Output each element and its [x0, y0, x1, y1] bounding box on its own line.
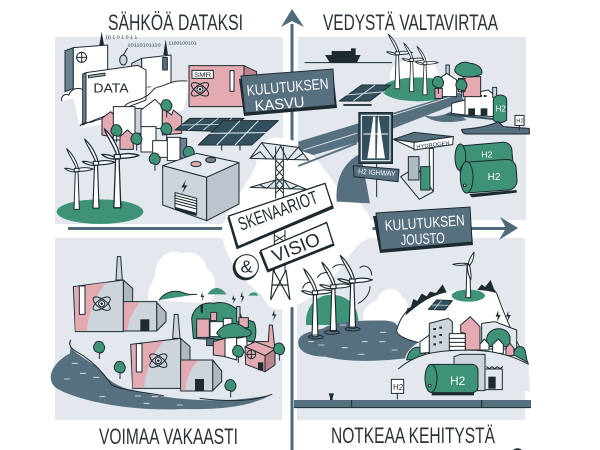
sea with waves — [298, 321, 418, 361]
hydrogen highway road — [298, 92, 467, 203]
arrow: horizontal axis — [68, 217, 518, 240]
riverside trees — [94, 341, 236, 397]
H2 road sign: H2 — [516, 119, 524, 125]
label: consumption growth: KASVU — [254, 94, 305, 115]
SMR reactor building — [189, 66, 257, 107]
town with white and pink buildings — [102, 99, 194, 171]
H2 road sign — [515, 115, 524, 130]
small dark mark — [513, 448, 522, 450]
SMR reactor building: SMR — [194, 72, 212, 79]
factory with hydrogen tank: H2 — [496, 105, 506, 114]
hydrogen storage tanks — [455, 142, 518, 197]
sign: Visio — [259, 222, 335, 273]
solar panels — [175, 118, 278, 150]
transmission tower — [250, 143, 308, 300]
H2 pipeline sign: H2 — [393, 383, 404, 392]
hydrogen filling station: HYDROGEN — [416, 141, 450, 151]
sign: Skenaariot — [227, 183, 334, 249]
ampersand badge — [233, 255, 258, 280]
backing buildings behind tank — [454, 354, 503, 391]
label: consumption flexibility — [373, 207, 473, 253]
cloud — [363, 289, 408, 322]
green hill with wind turbines — [382, 34, 455, 101]
heading: Sähköä dataksi: SÄHKÖÄ DATAKSI — [108, 10, 243, 35]
hydrogen pipeline — [294, 393, 531, 408]
scene: steady power — [51, 251, 285, 409]
wind farm on green hill — [57, 129, 143, 224]
panel: top-right background — [298, 37, 526, 220]
H2 pipeline sign — [391, 379, 404, 399]
panel: bottom-right background — [297, 238, 525, 420]
heading: Voimaa vakaasti: VOIMAA VAKAASTI — [99, 424, 238, 449]
small turbine on hill — [452, 252, 485, 302]
panel: top-left background — [55, 37, 283, 224]
highway sign: H2 IGHWAY — [358, 167, 396, 178]
cloud — [148, 251, 215, 303]
cargo ship — [305, 48, 392, 63]
factory with hydrogen tank — [447, 87, 529, 134]
white riverbank and river — [51, 340, 272, 409]
hydrogen filling station — [393, 132, 453, 199]
offshore wind turbines — [302, 255, 372, 339]
rooftop solar panel — [428, 300, 452, 310]
sign: Visio: VISIO — [269, 228, 323, 266]
heading: Vedystä valtavirtaa: VEDYSTÄ VALTAVIRTAA — [323, 10, 498, 35]
data centre buildings: DATA — [93, 82, 129, 96]
treeline, sparks and town — [159, 288, 276, 363]
scene: hydrogen mainstream — [298, 34, 529, 203]
town buildings and trees — [398, 310, 530, 392]
green H2 tank — [425, 364, 478, 395]
nuclear power plant 2 — [131, 314, 222, 391]
brick factory — [245, 325, 285, 372]
heading: Notkeaa kehitystä: NOTKEAA KEHITYSTÄ — [331, 423, 495, 448]
transmission tower and scenario signs — [227, 143, 335, 300]
hydrogen storage tanks: H2 — [481, 150, 493, 160]
sign: Skenaariot: SKENAARIOT — [235, 186, 321, 235]
ampersand badge: & — [241, 257, 253, 277]
nuclear power plant 1 — [73, 257, 166, 332]
panel: bottom-left background — [55, 238, 282, 420]
scene: electricity for data — [57, 32, 278, 224]
label: consumption growth: KULUTUKSEN — [246, 75, 329, 100]
battery storage unit — [163, 153, 239, 221]
label: consumption flexibility: JOUSTO — [400, 230, 445, 249]
data centre buildings — [62, 45, 190, 128]
village with trees — [433, 62, 482, 98]
antennas and binary data stream — [99, 32, 197, 65]
antennas and binary data stream: 1100100101 — [168, 40, 197, 45]
green H2 tank: H2 — [450, 374, 466, 388]
white hill with treeline — [397, 280, 530, 364]
antennas and binary data stream: 10110101110 — [127, 43, 161, 48]
hydrogen storage tanks: H2 — [488, 172, 501, 183]
antennas and binary data stream: ))) 1 0 1 0 1 1 — [106, 34, 138, 39]
green island — [306, 295, 358, 325]
arrow: vertical axis — [281, 9, 304, 450]
label: consumption flexibility: KULUTUKSEN — [384, 212, 465, 235]
label: consumption growth — [239, 69, 337, 116]
highway sign — [353, 113, 399, 197]
white central halo — [222, 138, 373, 309]
scene: agile development — [294, 252, 531, 450]
solar panel — [339, 85, 391, 105]
